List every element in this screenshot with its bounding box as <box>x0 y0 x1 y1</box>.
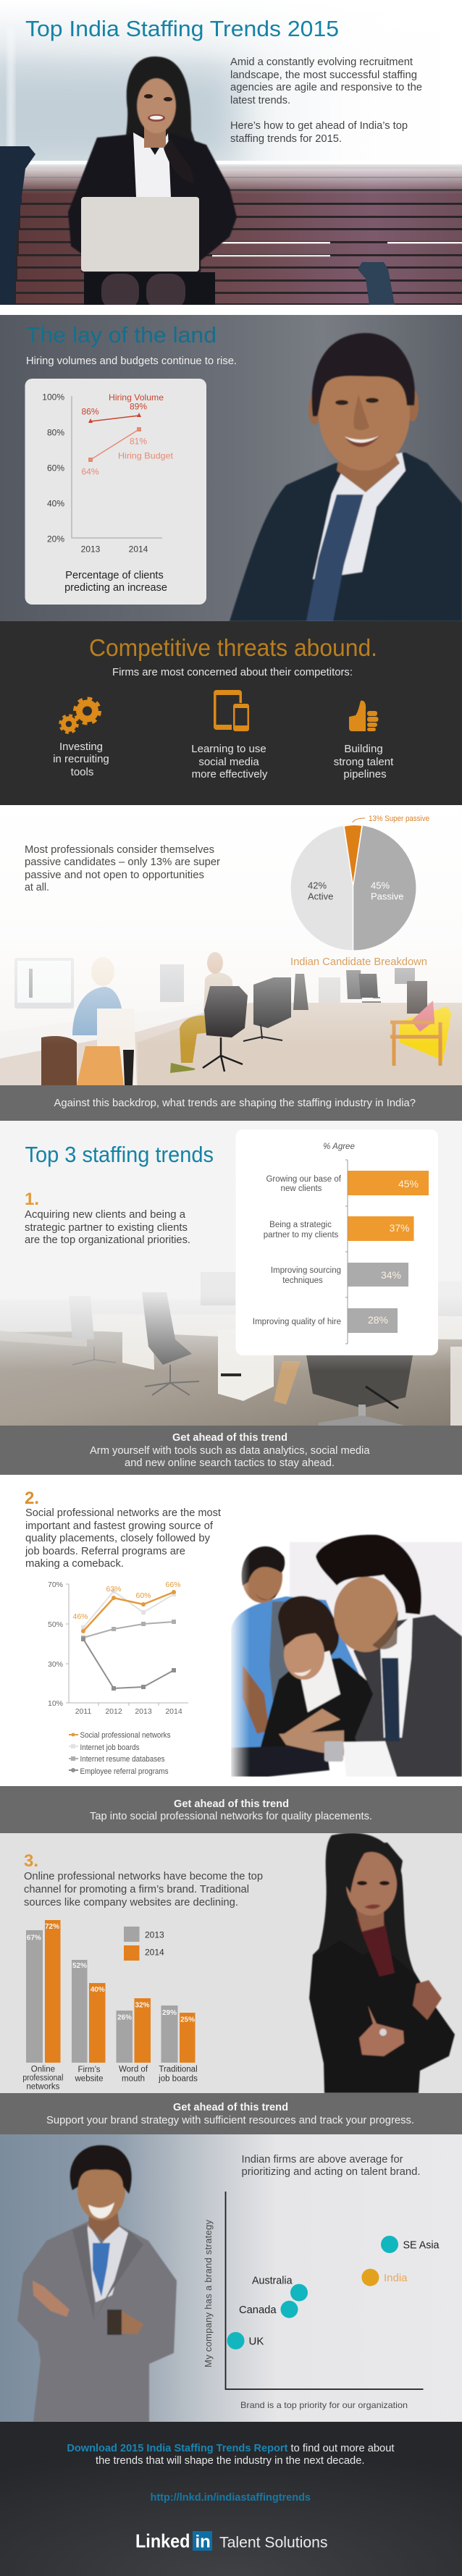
point: Australia: Australia <box>252 2275 293 2286</box>
series: social professional networks <box>81 1590 176 1633</box>
bar values <box>27 1923 195 2024</box>
logo: LinkedIn Talent Solutions: Talent Solutions <box>219 2534 327 2551</box>
series: hiring budget: 64% <box>81 466 99 476</box>
bar chart: percent agree: 28% <box>368 1314 388 1326</box>
panel: footer call to action <box>0 2422 462 2576</box>
text block: Acquiring new clients and being a <box>25 1209 186 1221</box>
series: internet job boards <box>81 1589 176 1630</box>
banner: get ahead of trend 3 <box>0 2093 462 2134</box>
bar chart: percent agree: Improving sourcing <box>271 1266 341 1275</box>
legend: 2013 <box>145 1930 164 1940</box>
text block: quality placements, closely followed by <box>25 1533 211 1544</box>
intro text: Amid a constantly evolving recruitment <box>230 56 413 68</box>
scatter plot: brand strategy vs priority <box>203 2192 440 2410</box>
text block: sources like company websites are declining. <box>24 1897 238 1908</box>
heading: Competitive threats abound. <box>89 634 377 661</box>
scatter plot: brand strategy vs priority: Brand is a top priority for our organization <box>240 2400 408 2410</box>
bar chart: percent agree: new clients <box>281 1184 322 1193</box>
text block: channel for promoting a firm’s brand. Traditional <box>24 1884 249 1895</box>
heading: Top 3 staffing trends <box>25 1142 214 1167</box>
data labels: 66% <box>165 1580 181 1589</box>
label: investing in recruiting tools: in recruiting <box>53 753 109 765</box>
text block: job boards. Referral programs are <box>25 1546 185 1557</box>
line chart: sources of quality placements: 30% <box>48 1660 63 1669</box>
numeral 1: 1. <box>25 1190 39 1209</box>
banner: get ahead of trend 1 <box>0 1426 462 1475</box>
legend <box>124 1927 164 1961</box>
point: Australia <box>252 2275 308 2302</box>
intro text: agencies are agile and responsive to the <box>230 82 422 93</box>
chart caption <box>64 570 167 594</box>
bar values: 40% <box>91 1986 105 1994</box>
scatter plot: brand strategy vs priority: My company has a brand strategy <box>203 2220 214 2367</box>
chart card: hiring volume and budget: 2014 <box>129 544 148 555</box>
label: building strong talent pipelines: strong talent <box>334 756 394 768</box>
point: Canada: Canada <box>239 2304 277 2316</box>
series: hiring volume <box>81 392 164 423</box>
title: Top India Staffing Trends 2015 <box>25 16 339 41</box>
text block: passive candidates – only 13% are super <box>25 856 220 868</box>
photo: open plan office <box>0 952 462 1085</box>
photo: empty office <box>0 1121 462 1426</box>
banner: against this backdrop: Against this backdrop, what trends are shaping the staffing industry in India? <box>54 1097 416 1109</box>
line chart: sources of quality placements: 70% <box>48 1580 63 1589</box>
panel: trend 2 <box>25 1489 462 1781</box>
chart card: hiring volume and budget: 2013 <box>81 544 101 555</box>
chart caption: Percentage of clients <box>65 570 164 581</box>
logo: LinkedIn Talent Solutions: in <box>196 2533 211 2551</box>
banner: get ahead of trend 1: and new online search tactics to stay ahead. <box>125 1457 335 1469</box>
download text: to find out more about <box>291 2443 394 2454</box>
line chart: sources of quality placements <box>48 1580 188 1776</box>
banner: get ahead of trend 2 <box>0 1786 462 1833</box>
panel: the lay of the land <box>0 315 462 621</box>
panel: talent brand <box>0 2134 462 2422</box>
text block: Indian firms are above average for <box>242 2154 403 2165</box>
series: employee referral programs <box>81 1637 176 1691</box>
icon: thumbs up <box>349 701 378 731</box>
point: UK: UK <box>249 2336 264 2347</box>
category labels: professional <box>22 2074 63 2082</box>
logo: LinkedIn Talent Solutions: Linked <box>135 2530 190 2551</box>
text block <box>24 1871 263 1908</box>
label: building strong talent pipelines <box>334 743 394 780</box>
series: hiring volume: 86% <box>81 407 99 417</box>
chart card: hiring volume and budget: 20% <box>47 534 64 544</box>
photo: three colleagues at a laptop <box>228 1535 462 1781</box>
panel: competitive threats <box>0 621 462 805</box>
bar values: 67% <box>27 1935 41 1942</box>
category labels <box>22 2065 198 2091</box>
text block: strategic partner to existing clients <box>25 1222 188 1234</box>
line chart: sources of quality placements: 2012 <box>105 1707 122 1716</box>
logo: LinkedIn Talent Solutions <box>135 2530 327 2551</box>
category labels: Online <box>31 2065 55 2074</box>
point: SE Asia: SE Asia <box>403 2239 440 2252</box>
data labels: 60% <box>135 1591 151 1600</box>
series: hiring volume: Hiring Volume <box>109 392 164 403</box>
point: India <box>361 2269 408 2286</box>
data labels: 63% <box>106 1585 122 1594</box>
data labels <box>72 1580 181 1621</box>
bar chart: channels for promoting brand <box>22 1920 198 2091</box>
heading: The lay of the land <box>26 322 217 348</box>
chart card: hiring volume and budget: 60% <box>47 463 64 473</box>
pie labels: 13% Super passive <box>369 815 429 823</box>
intro text: landscape, the most successful staffing <box>230 70 417 81</box>
legend: Social professional networks <box>80 1731 171 1740</box>
series: hiring budget: Hiring Budget <box>118 450 174 460</box>
banner: get ahead of trend 2: Tap into social professional networks for quality placements. <box>90 1810 372 1822</box>
download text <box>67 2443 395 2467</box>
label: learning to use social media: Learning to use <box>191 743 266 755</box>
legend: Internet resume databases <box>80 1755 165 1764</box>
line chart: sources of quality placements: 50% <box>48 1620 63 1629</box>
label: investing in recruiting tools: tools <box>71 766 93 778</box>
series: hiring budget <box>81 427 174 476</box>
report link: http://lnkd.in/indiastaffingtrends <box>151 2492 311 2504</box>
category labels: website <box>74 2075 103 2084</box>
bar values: 25% <box>180 2016 195 2024</box>
bar values: 52% <box>72 1962 87 1970</box>
banner: get ahead of trend 3: Support your brand strategy with sufficient resources and track your progress. <box>46 2114 414 2126</box>
line chart: sources of quality placements: 2014 <box>165 1707 182 1716</box>
category labels: Traditional <box>159 2065 198 2074</box>
chart card: hiring volume and budget: 100% <box>42 392 64 403</box>
bar chart: percent agree: 34% <box>381 1269 401 1281</box>
pie labels <box>308 815 429 902</box>
bar chart: percent agree: 37% <box>389 1222 410 1234</box>
banner: get ahead of trend 2: Get ahead of this trend <box>174 1798 289 1810</box>
text block: important and fastest growing source of <box>25 1520 214 1532</box>
text block: are the top organizational priorities. <box>25 1234 190 1246</box>
bar chart: percent agree: % Agree <box>323 1142 355 1151</box>
series: hiring budget: 81% <box>130 436 147 446</box>
pie labels: 42% <box>308 880 327 891</box>
legend: Internet job boards <box>80 1743 140 1752</box>
numeral 3: 3. <box>24 1851 38 1871</box>
text block <box>25 1209 190 1246</box>
point: Canada <box>239 2301 298 2318</box>
bar chart: percent agree: partner to my clients <box>264 1231 339 1239</box>
banner: get ahead of trend 1: Get ahead of this trend <box>172 1431 287 1444</box>
bar values: 32% <box>135 2001 150 2010</box>
panel: top 3 staffing trends, trend 1 <box>0 1121 462 1426</box>
photo: young man in grey suit <box>17 2145 177 2422</box>
text block: making a comeback. <box>25 1558 124 1570</box>
text block: Online professional networks have become the top <box>24 1871 263 1882</box>
chart card: hiring volume and budget: 40% <box>47 498 64 508</box>
series: internet resume databases <box>81 1620 176 1640</box>
bar chart: percent agree: 45% <box>398 1178 419 1190</box>
legend: Employee referral programs <box>80 1767 169 1776</box>
intro text: Here’s how to get ahead of India’s top <box>230 120 408 132</box>
pie caption: Indian Candidate Breakdown <box>290 956 427 968</box>
bar values: 29% <box>162 2009 177 2017</box>
bar chart: percent agree: Being a strategic <box>269 1221 332 1229</box>
banner: get ahead of trend 1: Arm yourself with tools such as data analytics, social media <box>90 1444 370 1457</box>
pie labels: 45% <box>371 880 390 891</box>
label: building strong talent pipelines: Building <box>344 743 383 755</box>
text block <box>25 1507 221 1570</box>
pie labels: Active <box>308 891 333 902</box>
label: learning to use social media <box>191 743 268 780</box>
series: hiring volume: 89% <box>130 401 147 411</box>
text block: prioritizing and acting on talent brand. <box>242 2166 420 2178</box>
photo: woman with crossed arms <box>309 1833 455 2093</box>
label: investing in recruiting tools: Investing <box>59 741 103 753</box>
label: learning to use social media: more effectively <box>192 768 268 780</box>
chart card: hiring volume and budget <box>25 379 206 605</box>
panel: hero <box>0 0 462 310</box>
bar chart: percent agree: Improving quality of hire <box>253 1318 341 1326</box>
download text: the trends that will shape the industry in the next decade. <box>96 2455 365 2467</box>
text block: passive and not open to opportunities <box>25 870 204 881</box>
chart caption: predicting an increase <box>64 582 167 594</box>
icon: gears <box>60 699 100 733</box>
intro text: latest trends. <box>230 95 290 106</box>
photo: smiling man in suit <box>230 333 462 621</box>
point: UK <box>227 2332 264 2349</box>
photo: woman with laptop on bench <box>0 0 462 310</box>
bar chart: percent agree: Growing our base of <box>266 1175 342 1184</box>
bar values: 72% <box>45 1923 59 1931</box>
legend: 2014 <box>145 1948 164 1958</box>
point: SE Asia <box>381 2236 440 2253</box>
data labels: 46% <box>72 1612 88 1621</box>
category labels: Word of <box>119 2065 148 2074</box>
legend <box>69 1731 171 1776</box>
text block: Social professional networks are the most <box>25 1507 221 1519</box>
intro text: staffing trends for 2015. <box>230 133 342 145</box>
pie labels: Passive <box>371 891 404 902</box>
intro text <box>230 56 422 145</box>
label: learning to use social media: social media <box>198 756 259 768</box>
line chart: sources of quality placements: 10% <box>48 1699 63 1708</box>
line chart: sources of quality placements: 2011 <box>75 1707 91 1716</box>
pie chart: Indian candidate breakdown <box>290 815 429 968</box>
category labels: Firm’s <box>77 2066 101 2074</box>
text block <box>242 2154 420 2178</box>
banner: get ahead of trend 3: Get ahead of this trend <box>173 2101 288 2113</box>
label: building strong talent pipelines: pipelines <box>343 768 387 780</box>
text block <box>25 844 220 893</box>
banner: against this backdrop <box>0 1085 462 1121</box>
text block: Most professionals consider themselves <box>25 844 214 856</box>
text block: at all. <box>25 882 49 893</box>
panel: passive candidates with office photo <box>0 805 462 1085</box>
category labels: mouth <box>122 2075 145 2084</box>
category labels: job boards <box>158 2075 198 2084</box>
subheading: Hiring volumes and budgets continue to rise. <box>26 355 237 367</box>
subheading: Firms are most concerned about their competitors: <box>112 666 353 678</box>
download text: Download 2015 India Staffing Trends Report <box>67 2443 288 2454</box>
chart card: hiring volume and budget: 80% <box>47 427 64 437</box>
bar values: 26% <box>117 2014 132 2021</box>
bar chart: percent agree: techniques <box>282 1276 323 1285</box>
category labels: networks <box>26 2082 60 2091</box>
numeral 2: 2. <box>25 1489 39 1508</box>
panel: trend 3 <box>0 1833 462 2093</box>
icon: tablet and phone <box>214 690 250 732</box>
line chart: sources of quality placements: 2013 <box>135 1707 152 1716</box>
label: investing in recruiting tools <box>53 741 109 778</box>
bar chart: percent agree <box>236 1129 438 1355</box>
point: India: India <box>384 2272 408 2284</box>
